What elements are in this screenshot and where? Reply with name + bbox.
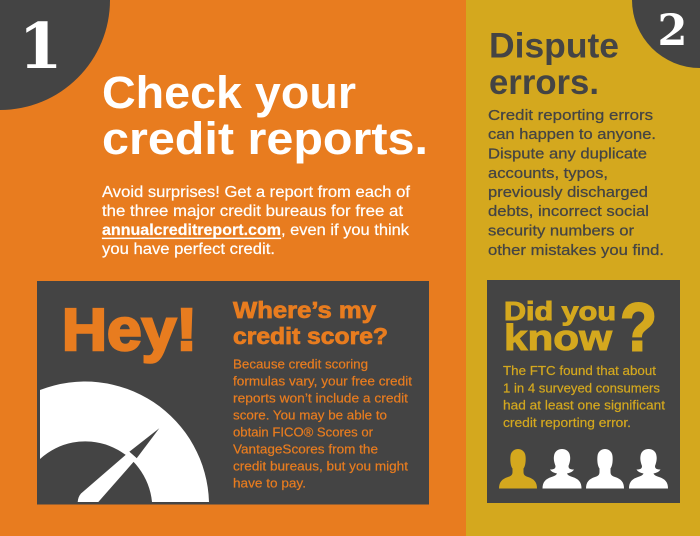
text block: credit score explanation: Because credit scoring (233, 358, 368, 372)
text block: credit score explanation: formulas vary, your free credit (233, 374, 413, 388)
text block: credit score explanation: obtain FICO® Scores or (233, 426, 373, 440)
text block: credit score explanation: score. You may be able to (233, 408, 387, 422)
text block: dispute details: previously discharged (488, 184, 648, 201)
badge: step 2: 2 (658, 6, 687, 56)
text block: dispute details: accounts, typos, (488, 165, 608, 182)
panel: step 2 background (466, 0, 700, 536)
text block: credit score explanation: reports won’t include a credit (233, 392, 409, 406)
panel: did you know (487, 280, 680, 503)
title: check your credit reports: credit reports. (102, 113, 428, 164)
text block: FTC finding (503, 363, 665, 430)
title: check your credit reports (102, 67, 428, 164)
icon: person man (586, 449, 624, 488)
chart: speedometer gauge (40, 382, 209, 502)
heading: where's my credit score: credit score? (233, 323, 388, 349)
icon: question mark: ? (620, 290, 657, 366)
heading: did you know: know (504, 317, 613, 358)
title: check your credit reports: Check your (102, 67, 356, 118)
text block: FTC finding: had at least one significant (503, 398, 665, 412)
text block: credit score explanation: VantageScores from the (233, 442, 378, 456)
text block: credit score explanation (233, 358, 413, 490)
text block: credit score explanation: have to pay. (233, 476, 306, 490)
heading: where's my credit score (233, 297, 388, 349)
text block: dispute details: Credit reporting errors (488, 107, 653, 124)
text block: intro: , even if you think (281, 222, 409, 239)
title: dispute errors: Dispute (489, 26, 619, 66)
badge: step 1 (0, 0, 110, 110)
title: dispute errors (489, 26, 619, 102)
icon: person woman (629, 449, 668, 488)
text block: FTC finding: The FTC found that about (503, 363, 656, 378)
text block: intro (102, 184, 411, 258)
heading: did you know: Did you (504, 296, 616, 326)
text block: dispute details: other mistakes you find. (488, 242, 664, 259)
heading: where's my credit score: Where’s my (233, 297, 376, 323)
text block: credit score explanation: credit bureaus, but you might (233, 460, 409, 474)
text block: FTC finding: credit reporting error. (503, 415, 631, 430)
icon: person highlighted (499, 449, 537, 488)
text block: dispute details: security numbers or (488, 222, 634, 240)
badge: step 2 (632, 0, 700, 68)
panel: step 1 background (0, 0, 466, 536)
badge: step 1: 1 (19, 9, 62, 83)
text block: dispute details: debts, incorrect social (488, 203, 649, 220)
heading: did you know (504, 296, 616, 358)
icon: person woman (542, 449, 582, 488)
text block: dispute details (488, 107, 664, 259)
text block: intro: the three major credit bureaus for free at (102, 203, 404, 220)
text block: FTC finding: 1 in 4 surveyed consumers (503, 380, 660, 396)
text block: dispute details: Dispute any duplicate (488, 146, 647, 162)
text block: dispute details: can happen to anyone. (488, 126, 656, 143)
heading: hey: Hey! (62, 297, 197, 363)
text block: intro: you have perfect credit. (102, 241, 275, 258)
title: dispute errors: errors. (489, 63, 599, 102)
panel: where's my credit score (37, 281, 429, 504)
text block: intro: annualcreditreport.com (102, 222, 281, 239)
text block: intro: Avoid surprises! Get a report from each of (102, 184, 411, 201)
